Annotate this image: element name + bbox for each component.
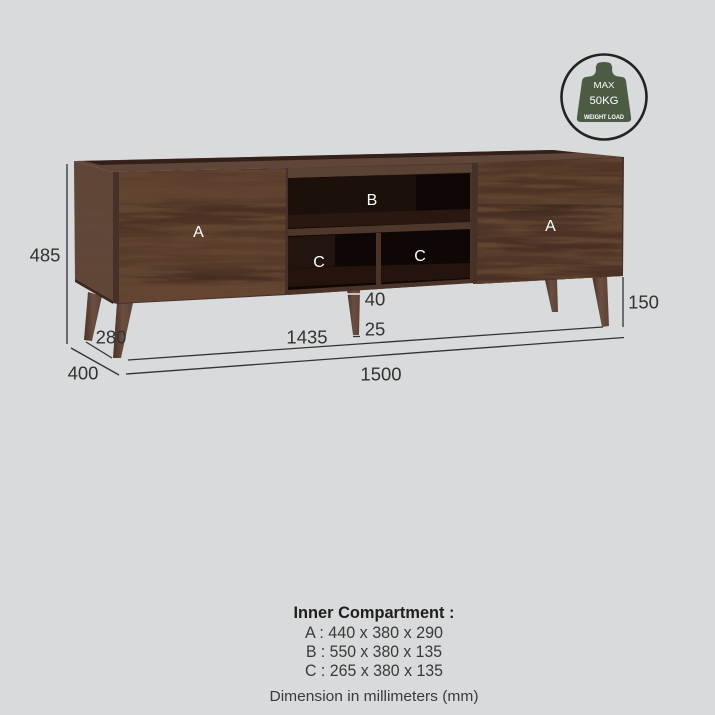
units note: Dimension in millimeters (mm) [270, 688, 479, 705]
label A left: A [193, 224, 204, 241]
left side panel [74, 161, 113, 304]
door A right [472, 155, 624, 287]
label C right: C [414, 248, 426, 265]
leg: back right [545, 279, 558, 312]
badge text: WEIGHT LOAD [584, 115, 625, 121]
leg: front left [113, 302, 133, 358]
dimension lines [67, 164, 624, 375]
spec B: B : 550 x 380 x 135 [306, 642, 442, 661]
inner compartment specs [270, 604, 479, 705]
icon: weight [577, 62, 631, 122]
label A right: A [545, 218, 556, 235]
dimension 150: 150 [628, 292, 659, 312]
middle open compartment [285, 163, 474, 295]
dimension numbers [30, 244, 659, 384]
max load badge [562, 54, 646, 140]
leg: middle [347, 290, 360, 335]
specs heading: Inner Compartment : [294, 604, 454, 622]
leg: front right [592, 276, 609, 327]
shelf [288, 222, 470, 236]
tv cabinet [70, 150, 624, 358]
dimension 40: 40 [365, 288, 385, 310]
badge text: MAX [594, 80, 615, 90]
compartment labels [193, 192, 556, 271]
divider [376, 233, 381, 286]
dimension 280: 280 [96, 326, 126, 348]
top rear rim [84, 150, 578, 165]
dimension 1500: 1500 [360, 364, 402, 384]
badge text [584, 80, 625, 121]
label B: B [367, 192, 377, 209]
dimension 1435: 1435 [286, 326, 328, 348]
dimension 400: 400 [68, 362, 98, 384]
cabinet top [74, 150, 624, 172]
spec C: C : 265 x 380 x 135 [305, 661, 443, 680]
spec A: A : 440 x 380 x 290 [305, 623, 443, 642]
dimension 25: 25 [365, 318, 385, 340]
badge text: 50KG [590, 95, 618, 107]
door A left [113, 165, 290, 307]
leg: back left [84, 292, 102, 341]
label C left: C [313, 254, 325, 271]
dimension 485: 485 [30, 244, 60, 266]
badge ring [562, 54, 646, 140]
